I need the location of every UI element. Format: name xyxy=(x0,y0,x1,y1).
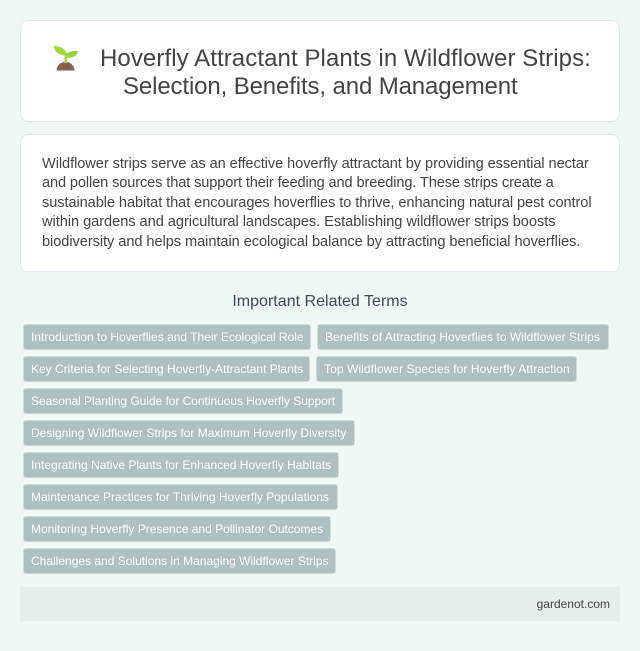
footer bar xyxy=(20,587,620,621)
tag 8: Maintenance Practices for Thriving Hoverfly Populations xyxy=(31,490,329,504)
tag 4: Top Wildflower Species for Hoverfly Attraction xyxy=(324,362,570,376)
tag 8 xyxy=(23,484,338,510)
panel: title card xyxy=(20,20,620,122)
tag 5: Seasonal Planting Guide for Continuous Hoverfly Support xyxy=(31,394,335,408)
tag 10 xyxy=(23,548,336,574)
intro line 5: biodiversity and helps maintain ecological balance by attracting beneficial hoverflies. xyxy=(42,234,580,250)
heading: related terms: Important Related Terms xyxy=(232,293,408,310)
title line 2: Selection, Benefits, and Management xyxy=(123,73,518,100)
tag 9 xyxy=(23,516,331,542)
tag 6 xyxy=(23,420,355,446)
tag 4 xyxy=(316,356,577,382)
footer credit: gardenot.com xyxy=(537,597,610,611)
tag 7 xyxy=(23,452,339,478)
icon: seedling xyxy=(54,46,78,70)
tag 1: Introduction to Hoverflies and Their Ecological Role xyxy=(31,330,304,344)
intro line 4: within gardens and agricultural landscapes. Establishing wildflower strips boosts xyxy=(42,214,556,230)
intro line 1: Wildflower strips serve as an effective hoverfly attractant by providing essential nectar xyxy=(42,156,589,172)
title line 1: Hoverfly Attractant Plants in Wildflower Strips: xyxy=(100,45,591,72)
tag 7: Integrating Native Plants for Enhanced Hoverfly Habitats xyxy=(31,458,331,472)
tag 9: Monitoring Hoverfly Presence and Pollinator Outcomes xyxy=(31,522,323,536)
intro line 3: sustainable habitat that encourages hoverflies to thrive, enhancing natural pest control xyxy=(42,195,592,211)
tag 3 xyxy=(23,356,310,382)
tag 2: Benefits of Attracting Hoverflies to Wildflower Strips xyxy=(325,330,600,344)
tag 5 xyxy=(23,388,343,414)
tag 1 xyxy=(23,324,311,350)
tag 6: Designing Wildflower Strips for Maximum Hoverfly Diversity xyxy=(31,426,346,440)
tag 3: Key Criteria for Selecting Hoverfly-Attractant Plants xyxy=(31,362,303,376)
tag 10: Challenges and Solutions in Managing Wildflower Strips xyxy=(31,554,328,568)
intro line 2: and pollen sources that support their feeding and breeding. These strips create a xyxy=(42,175,554,191)
tag 2 xyxy=(317,324,609,350)
panel: intro text xyxy=(20,134,620,272)
